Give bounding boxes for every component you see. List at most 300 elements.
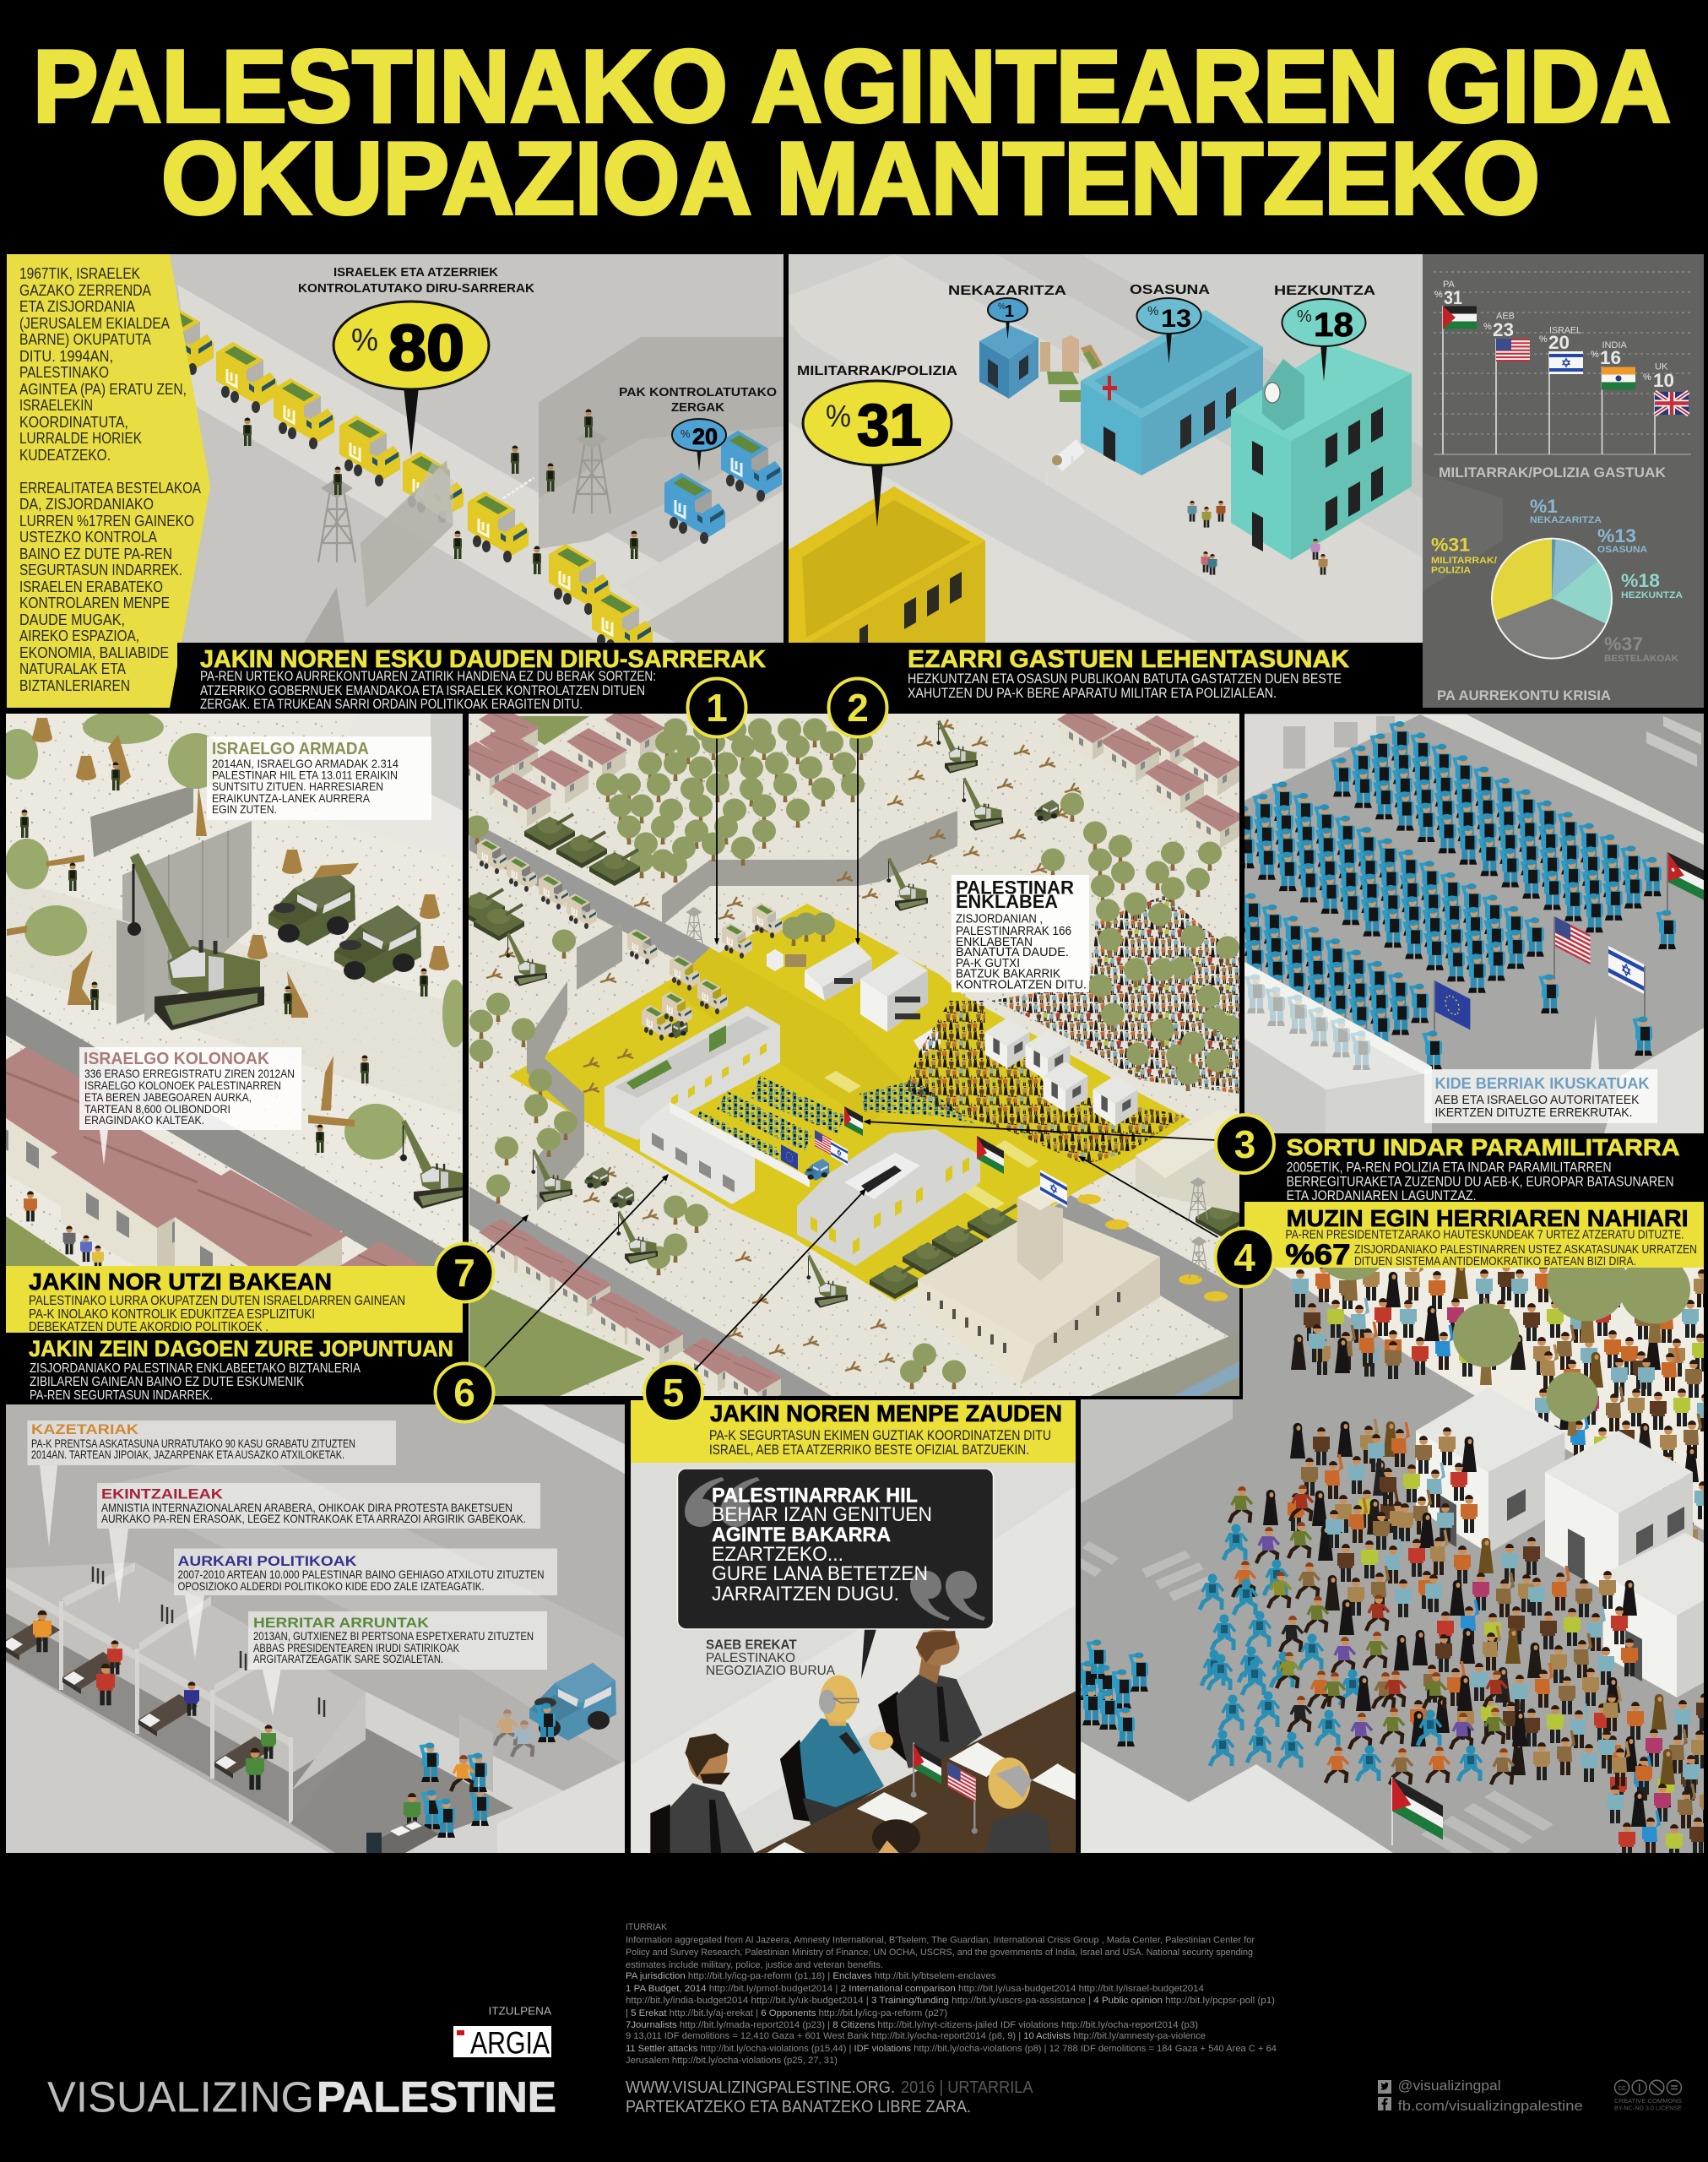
speech bubble: erekat quote <box>677 1469 993 1679</box>
flag chart: military police spending: 31 <box>1444 287 1462 308</box>
callout: 20 percent taxes: ZERGAK <box>671 401 725 415</box>
callout: israeli settlers <box>79 1047 301 1165</box>
callout: new recruits vetted: KIDE BERRIAK IKUSKATUAK <box>1435 1075 1650 1092</box>
footer: sources: http://bit.ly/india-budget2014 http://bit.ly/uk-budget2014 | 3 Training/funding http://bit.ly/uscrs-pa-assistance | 4 Public opinion http://bit.ly/pcpsr-poll (p1) <box>626 1996 1275 2006</box>
heading 6: who is in your sights: ZISJORDANIAKO PALESTINAR ENKLABEETAKO BIZTANLERIA <box>30 1361 361 1376</box>
sidebar: yellow text panel: ETA ZISJORDANIA <box>19 298 135 315</box>
pie chart labels: %37 <box>1604 633 1643 655</box>
bubble: 18: 18 <box>1314 307 1353 344</box>
soldiers <box>243 409 638 574</box>
flag chart: military police spending: 20 <box>1548 332 1570 353</box>
heading 5: who you answer to <box>631 1400 1076 1463</box>
pie chart labels: %13 <box>1597 525 1636 546</box>
flag chart: military police spending: % <box>1591 350 1599 360</box>
callout: political opponents <box>174 1549 557 1659</box>
guards and detainee <box>404 1703 556 1838</box>
white houses <box>1416 1388 1704 1698</box>
flag chart: military police spending <box>1434 280 1689 454</box>
roads <box>469 820 1239 1396</box>
sidebar: yellow text panel: KUDEATZEKO. <box>19 447 111 464</box>
heading 6: who is in your sights: ZIBILAREN GAINEAN BAINO EZ DUTE ESKUMENIK <box>30 1375 305 1389</box>
sidebar: yellow text panel: ISRAELEKIN <box>19 397 93 414</box>
right beige building <box>1136 1109 1239 1213</box>
building: hospital <box>1081 310 1263 475</box>
wall: far concrete wall <box>539 337 784 498</box>
doorway <box>459 1714 493 1792</box>
person: bearded negotiator <box>650 1733 755 1853</box>
labels and bubbles: spending: OSASUNA <box>1130 283 1211 297</box>
yellow trucks <box>153 304 653 661</box>
footer: sources: Information aggregated from Al Jazeera, Amnesty International, B'Tselem, The Guardian, International Crisis Group , Mada Center, Palestinian Center for <box>626 1936 1255 1946</box>
settlers <box>24 1191 104 1272</box>
heading 5: who you answer to: PA-K SEGURTASUN EKIMEN GUZTIAK KOORDINATZEN DITU <box>709 1427 1051 1443</box>
blue jeep <box>529 1663 616 1741</box>
cranes <box>506 720 1003 1308</box>
enclave yellow zone <box>509 904 1190 1301</box>
badge 4: 4 <box>1234 1236 1255 1279</box>
panel: army and settlers illustration <box>6 714 463 1266</box>
sidebar: yellow text panel <box>7 254 210 708</box>
heading 4: defy the people's will: %67 <box>1285 1239 1351 1271</box>
ambulance stretcher <box>1047 439 1085 486</box>
pie chart labels: BESTELAKOAK <box>1604 654 1678 664</box>
panel: budget charts <box>1423 254 1704 708</box>
panel: spending buildings illustration <box>789 254 1423 643</box>
person: front left <box>872 1819 920 1855</box>
sidebar: yellow text panel: SEGURTASUN INDARREK. <box>19 562 182 579</box>
callout: palestinian enclave: ENKLABEA <box>956 891 1058 912</box>
footer: sources: | 5 Erekat http://bit.ly/aj-erekat | 6 Opponents http://bit.ly/icg-pa-reform (p27) <box>626 2008 947 2018</box>
towers <box>685 907 1208 1279</box>
sidebar: yellow text panel: KOORDINATUTA, <box>19 414 128 431</box>
pie chart labels: %31 <box>1431 534 1470 556</box>
beige administrative building <box>918 1185 1160 1385</box>
convoy trucks <box>477 839 783 1040</box>
ghost detainees <box>495 1709 534 1757</box>
footer: sources <box>626 1922 1277 2066</box>
speech bubble: erekat quote: GURE LANA BETETZEN <box>712 1562 928 1585</box>
palestinian flag <box>1392 1777 1443 1845</box>
heading 6: who is in your sights: JAKIN ZEIN DAGOEN ZURE JOPUNTUAN <box>29 1336 453 1361</box>
callout: 80 percent revenue: KONTROLATUTAKO DIRU-SARRERAK <box>298 282 535 296</box>
cell block walls <box>6 1562 366 1774</box>
olive trees <box>1313 1208 1690 1436</box>
building: military <box>789 486 985 643</box>
flag chart: military police spending: 23 <box>1493 319 1514 340</box>
callout: journalists <box>27 1421 396 1546</box>
panel: revenue trucks illustration <box>170 254 784 643</box>
callout: journalists: PA-K PRENTSA ASKATASUNA URRATUTAKO 90 KASU GRABATU ZITUZTEN <box>31 1437 355 1450</box>
sidebar: yellow text panel: AGINTEA (PA) ERATU ZEN, <box>19 381 187 398</box>
sidebar: yellow text panel: LURRALDE HORIEK <box>19 430 142 447</box>
callout: 80 percent revenue: 80 <box>388 312 464 384</box>
labels and bubbles: spending: HEZKUNTZA <box>1274 284 1376 298</box>
flag chart: military police spending: 16 <box>1600 347 1621 368</box>
footer: website and share line: PARTEKATZEKO ETA BANATZEKO LIBRE ZARA. <box>626 2098 971 2116</box>
footer: sources: 7Journalists http://bit.ly/mada-report2014 (p23) | 8 Citizens http://bit.ly/nyt-citizens-jailed IDF violations http://bit.ly/ocha-report2014 (p3) <box>626 2020 1198 2030</box>
panel: repression prison illustration <box>1 1402 625 1853</box>
bubble: 18: % <box>1297 307 1312 326</box>
callout: new recruits vetted <box>1424 1015 1657 1123</box>
person: saeb erekat <box>780 1676 893 1828</box>
bubble: 13: % <box>1147 304 1158 318</box>
attribution: saeb erekat: NEGOZIAZIO BURUA <box>706 1664 836 1678</box>
callout: palestinian enclave: PA-K GUTXI <box>956 957 1020 970</box>
footer: creative commons licence: cc <box>1618 2083 1626 2092</box>
footer: sources: 9 13,011 IDF demolitions = 12,410 Gaza + 601 West Bank http://bit.ly/ocha-report2014 (p8, 9) | 10 Activists http://bit.ly/amnesty-pa-violence <box>626 2031 1206 2041</box>
heading 3: create paramilitary: SORTU INDAR PARAMILITARRA <box>1287 1134 1680 1160</box>
footer: translation credit: ITZULPENA <box>488 2005 551 2018</box>
olive orchard <box>465 718 1084 1389</box>
bubble: 31 <box>803 381 952 527</box>
callout: new recruits vetted: IKERTZEN DITUZTE ERREKRUTAK. <box>1435 1105 1633 1120</box>
heading 7: who to leave alone: DEBEKATZEN DUTE AKORDIO POLITIKOEK . <box>29 1320 268 1334</box>
callout: israeli settlers: ISRAELGO KOLONOEK PALESTINARREN <box>84 1078 281 1092</box>
road <box>6 996 463 1266</box>
heading 7: who to leave alone: JAKIN NOR UTZI BAKEAN <box>29 1268 332 1295</box>
badge 4 <box>1216 1228 1273 1287</box>
sidebar: yellow text panel: (JERUSALEM EKIALDEA <box>19 315 170 332</box>
attribution: saeb erekat <box>706 1638 836 1678</box>
army jeeps <box>268 868 421 983</box>
desk <box>366 1820 439 1853</box>
footer: sources: Jerusalem http://bit.ly/ocha-violations (p25, 27, 31) <box>626 2056 838 2066</box>
callout: 20 percent taxes <box>619 386 777 471</box>
sidebar: yellow text panel: GAZAKO ZERRENDA <box>19 282 151 299</box>
red-roofed houses <box>454 706 1245 1410</box>
callout: palestinian enclave: KONTROLATZEN DITU. <box>956 978 1087 991</box>
callout: ordinary citizens <box>248 1611 547 1715</box>
badge 1 <box>687 679 746 736</box>
callout: israeli army: PALESTINAR HIL ETA 13.011 ERAIKIN <box>212 769 398 782</box>
badge 2 <box>829 679 887 736</box>
footer: website and share line: WWW.VISUALIZINGPALESTINE.ORG. <box>626 2078 895 2097</box>
pie chart: budget crisis <box>1492 539 1612 659</box>
footer: social links: fb.com/visualizingpalestine <box>1398 2098 1583 2114</box>
callout: activists <box>97 1483 540 1604</box>
bubble: 1 <box>988 298 1028 340</box>
panel: heading strip revenue: ATZERRIKO GOBERNUEK EMANDAKOA ETA ISRAELEK KONTROLATZEN DITUEN <box>200 682 645 698</box>
callout: palestinian enclave: ENKLABETAN <box>956 936 1033 949</box>
trees in crowd <box>1041 821 1242 1091</box>
panel: crowd protest illustration <box>1080 1208 1708 1862</box>
sidebar: yellow text panel: EKONOMIA, BALIABIDE <box>19 644 169 661</box>
title: OKUPAZIOA MANTENTZEKO <box>161 121 1540 236</box>
panel: paramilitary parade illustration <box>1244 714 1704 1133</box>
lower crowd on street <box>1200 1419 1708 1862</box>
footer: logo: VISUALIZING <box>47 2073 314 2121</box>
speech bubble: erekat quote: PALESTINARRAK HIL <box>712 1485 918 1507</box>
flag chart: military police spending: 10 <box>1653 370 1674 391</box>
footer: sources: 1 PA Budget, 2014 http://bit.ly/pmof-budget2014 | 2 International comparison http://bit.ly/usa-budget2014 http://bit.ly/israel-budget2014 <box>626 1984 1204 1994</box>
parade block 3 <box>1185 894 1429 1059</box>
callout: activists: AURKAKO PA-REN ERASOAK, LEGEZ KONTRAKOAK ETA ARRAZOI ARGIRIK GABEKOAK. <box>101 1512 526 1525</box>
sidebar: yellow text panel: BARNE) OKUPATUTA <box>19 331 151 348</box>
blue soldiers in yard <box>692 1076 975 1169</box>
footer: logo <box>47 2073 556 2121</box>
badge 3 <box>1216 1115 1274 1173</box>
pie chart labels: %1 <box>1530 496 1558 517</box>
flag chart: military police spending: % <box>1643 372 1651 383</box>
sidebar: yellow text panel: AIREKO ESPAZIOA, <box>19 627 139 644</box>
crosswalks <box>1081 1541 1553 1856</box>
prison and headquarters <box>605 1006 980 1266</box>
table <box>755 1691 1076 1853</box>
panel: heading strip spending <box>908 646 1349 701</box>
grass <box>6 1216 80 1266</box>
speech bubble: erekat quote: EZARTZEKO... <box>712 1543 843 1566</box>
fields and small village <box>1040 335 1103 402</box>
white buildings foreground <box>1081 1741 1393 1853</box>
settler houses <box>6 1047 423 1266</box>
blue trucks <box>664 431 782 544</box>
callout: israeli army: ISRAELGO ARMADA <box>212 740 369 758</box>
heading 4: defy the people's will <box>1244 1202 1704 1271</box>
heading 7: who to leave alone <box>6 1266 463 1334</box>
badge 1: 1 <box>706 686 728 730</box>
building: agriculture <box>979 325 1038 399</box>
taxis <box>1077 1194 1228 1301</box>
crowd in enclave <box>905 895 1239 1165</box>
tanks <box>454 814 1246 1299</box>
white building right <box>1604 1028 1704 1133</box>
enclave road <box>667 948 912 1123</box>
heading 3: create paramilitary <box>1244 1133 1704 1203</box>
callout: israeli settlers: TARTEAN 8,600 OLIBONDORI <box>84 1102 230 1116</box>
footer: translation credit: ARGIA <box>470 2026 550 2061</box>
flag chart: military police spending: AEB <box>1496 311 1515 321</box>
footer: sources: PA jurisdiction http://bit.ly/icg-pa-reform (p1,18) | Enclaves http://bit.ly/btselem-enclaves <box>626 1971 996 1981</box>
speech bubble: erekat quote: AGINTE BAKARRA <box>712 1524 891 1546</box>
footer: creative commons licence: CREATIVE COMMONS <box>1614 2099 1682 2105</box>
flag chart: military police spending: ISRAEL <box>1549 326 1581 336</box>
bubble: 13 <box>1136 298 1201 364</box>
callout: palestinian enclave: BATZUK BAKARRIK <box>956 968 1060 981</box>
heading 3: create paramilitary: ETA JORDANIAREN LAGUNTZAZ. <box>1287 1188 1477 1203</box>
flags: jordan, usa, israel, eu <box>1434 852 1705 1040</box>
callout: israeli army: EGIN ZUTEN. <box>212 802 277 816</box>
labels and bubbles: spending: MILITARRAK/POLIZIA <box>797 364 958 378</box>
callout: ordinary citizens: 2013AN, GUTXIENEZ BI PERTSONA ESPETXERATU ZITUZTEN <box>253 1629 534 1643</box>
badge 7 <box>436 1243 493 1302</box>
callout: political opponents: 2007-2010 ARTEAN 10.000 PALESTINAR BAINO GEHIAGO ATXILOTU ZITUZTEN <box>177 1567 544 1581</box>
labels and bubbles: spending <box>797 283 1376 527</box>
crane <box>127 853 264 1030</box>
title: PALESTINAKO AGINTEAREN GIDA <box>33 29 1671 144</box>
callout: new recruits vetted: AEB ETA ISRAELGO AUTORITATEEK <box>1435 1093 1640 1107</box>
concrete slabs <box>90 785 193 857</box>
panel: central isometric map <box>454 706 1246 1410</box>
callout: israeli settlers: ERAGINDAKO KALTEAK. <box>84 1113 204 1127</box>
callout: 80 percent revenue <box>298 266 535 456</box>
footer: logo: PALESTINE <box>317 2073 556 2121</box>
badge 2: 2 <box>847 686 869 730</box>
heading 6: who is in your sights: PA-REN SEGURTASUN INDARREK. <box>30 1388 213 1403</box>
heading 7: who to leave alone: PA-K INOLAKO KONTROLIK EDUKITZEA ESPLIZITUKI <box>29 1307 315 1322</box>
panel: heading strip revenue: JAKIN NOREN ESKU DAUDEN DIRU-SARRERAK <box>200 646 766 673</box>
badge 3: 3 <box>1234 1122 1255 1166</box>
speech bubble: erekat quote: BEHAR IZAN GENITUEN <box>712 1503 932 1526</box>
person: third negotiator <box>878 1629 982 1768</box>
footer: creative commons licence: BY-NC-ND 3.0 LICENSE <box>1614 2106 1682 2112</box>
panel: budget charts: MILITARRAK/POLIZIA GASTUAK <box>1439 464 1667 481</box>
big lower roof <box>6 1662 329 1853</box>
papers <box>767 1742 1076 1853</box>
callout: palestinian enclave: ZISJORDANIAN , <box>956 913 1043 926</box>
river <box>1090 1332 1239 1396</box>
callout: israeli settlers: ETA BEREN JABEGOAREN AURKA, <box>84 1090 252 1104</box>
cell beds <box>1 1618 274 1779</box>
heading 6: who is in your sights <box>29 1336 453 1403</box>
pie chart labels: POLIZIA <box>1431 566 1471 576</box>
callout: 80 percent revenue: ISRAELEK ETA ATZERRIEK <box>333 266 499 280</box>
badge 6: 6 <box>453 1371 475 1415</box>
callout: journalists: 2014AN. TARTEAN JIPOIAK, JAZARPENAK ETA AUSAZKO ATXILOKETAK. <box>31 1448 344 1461</box>
footer: social links: @visualizingpal <box>1398 2078 1501 2094</box>
attribution: saeb erekat: PALESTINAKO <box>706 1651 795 1665</box>
blue jeep <box>805 1159 829 1181</box>
callout: 20 percent taxes: % <box>680 427 691 440</box>
panel: budget charts: PA AURREKONTU KRISIA <box>1437 687 1611 703</box>
footer: sources: Policy and Survey Research, Palestinian Ministry of Finance, UN OCHA, USCRS, and the governments of India, Israel and USA. National security spending <box>626 1947 1253 1958</box>
callout: palestinian enclave: PALESTINAR <box>956 877 1074 899</box>
army soldiers <box>20 762 428 1153</box>
standing blue security forces <box>1080 1640 1148 1746</box>
callout: activists: AMNISTIA INTERNAZIONALAREN ARABERA, OHIKOAK DIRA PROTESTA BAKETSUEN <box>101 1501 512 1514</box>
footer: sources: ITURRIAK <box>626 1922 668 1932</box>
callout: israeli army <box>207 736 431 820</box>
parade block 2 <box>1216 782 1544 993</box>
ghost recruits <box>1247 975 1370 1070</box>
sidebar: yellow text panel: ISRAELEN ERABATEKO <box>19 579 163 595</box>
callout: israeli army: 2014AN, ISRAELGO ARMADAK 2.314 <box>212 757 399 770</box>
heading 4: defy the people's will: MUZIN EGIN HERRIAREN NAHIARI <box>1287 1205 1689 1231</box>
felled olive trees <box>0 710 468 1160</box>
footer: social links <box>1378 2078 1583 2114</box>
callout: palestinian enclave: PALESTINARRAK 166 <box>956 925 1071 938</box>
grass patches <box>469 716 645 1396</box>
footer: sources: 11 Settler attacks http://bit.ly/ocha-violations (p15,44) | IDF violations http://bit.ly/ocha-violations (p8) | 12 788 IDF demolitions = 184 Gaza + 540 Area C + 64 <box>626 2044 1277 2054</box>
sidebar: yellow text panel: NATURALAK ETA <box>19 660 126 677</box>
sidebar: yellow text panel: 1967TIK, ISRAELEK <box>19 265 140 282</box>
bulldozer <box>400 1120 469 1209</box>
callout: ordinary citizens: ARGITARATZEAGATIK SARE SOZIALETAN. <box>253 1652 443 1665</box>
bubble: 31: 31 <box>857 392 922 458</box>
sidebar: yellow text panel: ERREALITATEA BESTELAKOA <box>19 480 201 497</box>
flag chart: military police spending: % <box>1539 334 1548 345</box>
flag chart: military police spending: UK <box>1655 361 1668 372</box>
felled trees and debris <box>486 720 1081 1371</box>
corridor floor <box>290 1728 513 1853</box>
flag chart: military police spending: INDIA <box>1602 340 1628 350</box>
speech bubble: erekat quote: JARRAITZEN DUGU. <box>712 1583 899 1605</box>
callout: israeli settlers: 336 ERASO ERREGISTRATU ZIREN 2012AN <box>84 1067 295 1080</box>
footer: website and share line: 2016 | URTARRILA <box>901 2078 1033 2097</box>
sidebar: yellow text panel: KONTROLAREN MENPE <box>19 595 170 611</box>
pie chart labels: HEZKUNTZA <box>1621 590 1683 600</box>
bubble: 13: 13 <box>1161 305 1191 333</box>
sidebar: yellow text panel: DA, ZISJORDANIAKO <box>19 496 154 513</box>
pie chart labels: %18 <box>1621 570 1660 591</box>
number badges <box>436 679 1274 1422</box>
heading 5: who you answer to: JAKIN NOREN MENPE ZAUDEN <box>710 1400 1062 1426</box>
labels and bubbles: spending: NEKAZARITZA <box>948 284 1067 298</box>
callout: activists: EKINTZAILEAK <box>101 1486 224 1502</box>
flag chart: military police spending: % <box>1483 322 1492 332</box>
callout: ordinary citizens: HERRITAR ARRUNTAK <box>253 1615 430 1631</box>
flag chart: military police spending: PA <box>1443 280 1456 290</box>
callout: israeli settlers: ISRAELGO KOLONOAK <box>84 1050 270 1068</box>
enclave houses <box>984 1018 1138 1126</box>
sidebar: yellow text panel: BAINO EZ DUTE PA-REN <box>19 546 172 562</box>
footer: creative commons licence <box>1614 2080 1682 2112</box>
footer: sources: estimates include military, police, justice and veteran benefits. <box>626 1960 883 1970</box>
desk flags <box>911 1742 978 1833</box>
bubble: 1: % <box>998 302 1006 312</box>
callout: political opponents: AURKARI POLITIKOAK <box>177 1553 357 1569</box>
pie chart labels: MILITARRAK/ <box>1431 556 1497 566</box>
person: front right <box>985 1757 1051 1853</box>
sidebar: yellow text panel: PALESTINAKO <box>19 364 109 381</box>
callout: palestinian enclave: BANATUTA DAUDE. <box>956 946 1069 959</box>
panel: heading strip revenue: PA-REN URTEKO AURREKONTUAREN ZATIRIK HANDIENA EZ DU BERAK SORTZEN: <box>200 668 656 684</box>
panel: heading strip spending: EZARRI GASTUEN LEHENTASUNAK <box>908 646 1349 673</box>
attribution: saeb erekat: SAEB EREKAT <box>706 1638 797 1652</box>
callout: ordinary citizens: ABBAS PRESIDENTEAREN IRUDI SATIRIKOAK <box>253 1641 460 1654</box>
mini buildings: hospital, school <box>767 942 941 1054</box>
upper crowd on pavement <box>1291 1256 1708 1558</box>
footer: website and share line <box>626 2078 1033 2116</box>
footer: translation credit <box>453 2005 551 2061</box>
flag bearers <box>1424 910 1676 1070</box>
badge 5 <box>644 1363 702 1421</box>
wall: near concrete wall <box>361 460 453 608</box>
bubble: 1: 1 <box>1005 302 1014 321</box>
flags in yard <box>781 1106 1067 1208</box>
callout: israeli army: ERAIKUNTZA-LANEK AURRERA <box>212 791 371 805</box>
callout: journalists: KAZETARIAK <box>31 1421 139 1437</box>
panel: negotiators illustration <box>631 1400 1076 1855</box>
students <box>1187 501 1327 575</box>
jeeps <box>584 800 1059 1209</box>
callout: palestinian enclave <box>952 875 1089 992</box>
prisoners <box>33 1611 276 1790</box>
heading 3: create paramilitary: 2005ETIK, PA-REN POLIZIA ETA INDAR PARAMILITARREN <box>1287 1160 1612 1176</box>
sidebar: yellow text panel: DAUDE MUGAK, <box>19 611 125 628</box>
heading 4: defy the people's will: DITUEN SISTEMA ANTIDEMOKRATIKO BATEAN BIZI DIRA. <box>1354 1254 1636 1268</box>
building: school <box>1231 345 1412 560</box>
badge 5: 5 <box>663 1371 684 1415</box>
bubble: 18 <box>1282 299 1366 382</box>
title <box>33 29 1671 236</box>
heading 7: who to leave alone: PALESTINAKO LURRA OKUPATZEN DUTEN ISRAELDARREN GAINEAN <box>29 1294 405 1308</box>
leader lines with arrows <box>485 738 1218 1370</box>
sidebar: yellow text panel: DITU. 1994AN, <box>19 348 113 365</box>
flag chart: military police spending: % <box>1434 290 1443 300</box>
pie chart labels: NEKAZARITZA <box>1530 515 1602 525</box>
callout: israeli army: SUNTSITU ZITUEN. HARRESIAREN <box>212 780 383 793</box>
separation wall <box>527 811 957 1211</box>
bubble: 31: % <box>826 399 851 433</box>
parade block 1 <box>1333 721 1662 932</box>
heading 5: who you answer to: ISRAEL, AEB ETA ATZERRIKO BESTE OFIZIAL BATZUEKIN. <box>709 1442 1029 1458</box>
badge 7: 7 <box>453 1251 475 1295</box>
pie chart labels <box>1431 496 1683 664</box>
right roof <box>497 1761 625 1853</box>
panel: heading strip revenue <box>177 643 784 712</box>
pie chart labels: OSASUNA <box>1597 545 1647 555</box>
white building left <box>1244 962 1432 1133</box>
